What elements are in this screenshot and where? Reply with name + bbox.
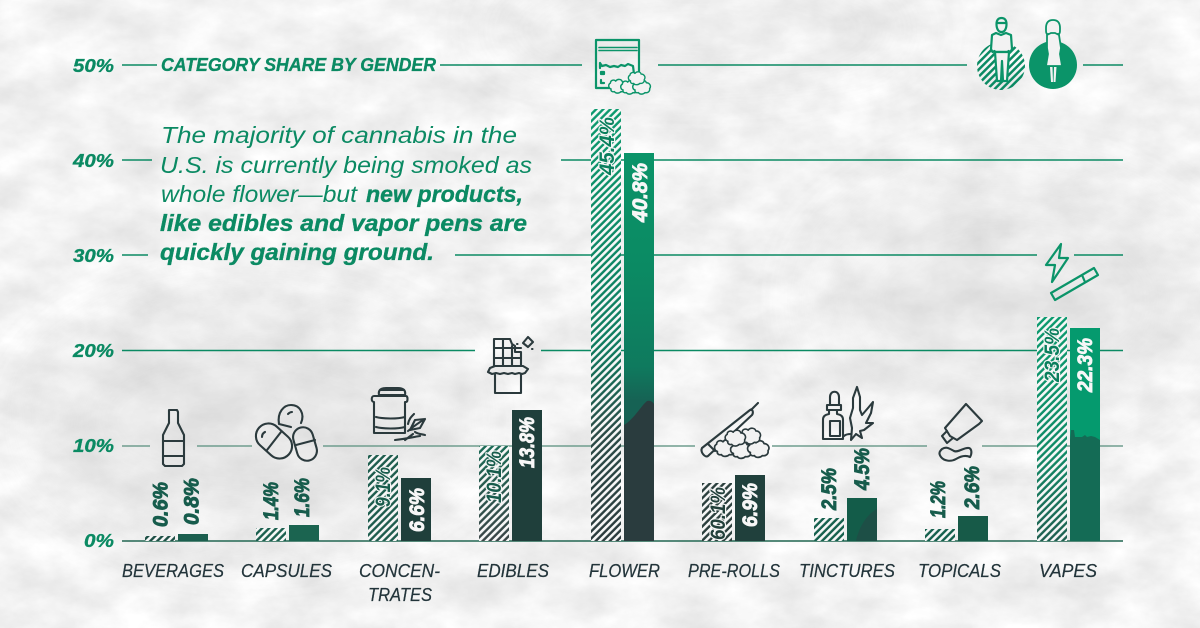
category labels: TINCTURES: [799, 561, 895, 581]
intro text block: new products,: [366, 181, 523, 207]
category labels: VAPES: [1039, 561, 1097, 581]
bars: Tinctures: 2.5%: [818, 468, 841, 511]
bars: Pre-rolls: 6.9%: [739, 483, 762, 527]
bars: Edibles: 13.8%: [516, 417, 539, 468]
y axis labels: [72, 55, 114, 551]
icon: bottle: [163, 410, 184, 466]
intro text block: U.S. is currently being smoked as: [160, 152, 533, 178]
category labels: CONCEN-: [359, 561, 440, 581]
icon: chocolate bar: [488, 337, 533, 393]
bars: Beverages: [145, 478, 208, 541]
category labels: TRATES: [368, 585, 432, 605]
icon: concentrate jar with leaf: [372, 388, 425, 440]
bars: Concentrates: [368, 455, 431, 541]
y axis labels: 0%: [84, 530, 114, 551]
intro text block: [160, 122, 533, 265]
bars: Edibles: [479, 410, 542, 541]
icon: man on hatched circle: [977, 18, 1025, 90]
bars: Topicals: [925, 466, 988, 541]
bars: Pre-rolls: 60.1%: [707, 487, 730, 540]
category labels: FLOWER: [589, 561, 660, 581]
bars: Flower: [591, 109, 654, 541]
bars: Vapes: 22.3%: [1074, 338, 1097, 393]
icon: flower bag with buds: [596, 40, 650, 94]
chart: bars by category: [145, 109, 1100, 541]
bars: Tinctures: 4.5%: [851, 448, 874, 491]
heading: CATEGORY SHARE BY GENDER: [161, 54, 437, 75]
y axis labels: 50%: [73, 55, 114, 76]
bars: Beverages: 0.6%: [150, 482, 172, 527]
bars: Edibles: 10.1%: [483, 451, 506, 503]
y axis labels: 30%: [73, 245, 114, 266]
y axis labels: 40%: [72, 150, 114, 171]
icon: vape pen and lightning bolt: [1046, 244, 1098, 300]
icon: joint with buds: [702, 403, 769, 458]
y axis labels: 20%: [72, 340, 114, 361]
icon: topical tube: [939, 404, 982, 461]
bars: Capsules: 1.4%: [260, 482, 283, 520]
category labels: CAPSULES: [241, 561, 332, 581]
intro text block: quickly gaining ground.: [160, 239, 434, 265]
bars: Capsules: [256, 478, 319, 541]
intro text block: The majority of cannabis in the: [161, 122, 517, 148]
bars: Pre-rolls: [702, 475, 765, 541]
bars: Tinctures: [814, 448, 877, 541]
intro text block: whole flower—but: [161, 181, 359, 207]
bars: Concentrates: 9.1%: [372, 467, 395, 507]
bars: Topicals: 1.2%: [927, 481, 950, 518]
category labels: [122, 561, 1097, 605]
icon: capsules: [251, 405, 319, 464]
bars: Vapes: 23.5%: [1041, 328, 1064, 383]
category labels: PRE-ROLLS: [688, 561, 780, 581]
bars: Flower: 45.4%: [596, 117, 619, 176]
bars: Vapes: [1037, 317, 1100, 541]
category labels: EDIBLES: [477, 561, 549, 581]
bars: Capsules: 1.6%: [291, 478, 314, 517]
category labels: BEVERAGES: [122, 561, 224, 581]
bars: Beverages: 0.8%: [180, 478, 204, 525]
category labels: TOPICALS: [918, 561, 1001, 581]
icon: woman on solid circle: [1029, 20, 1077, 89]
intro text block: like edibles and vapor pens are: [160, 210, 527, 236]
bars: Topicals: 2.6%: [961, 466, 984, 510]
bars: Concentrates: 6.6%: [406, 488, 429, 532]
icon: tincture bottle with leaf: [823, 387, 873, 440]
y axis labels: 10%: [73, 435, 114, 456]
bars: Flower: 40.8%: [629, 163, 652, 223]
